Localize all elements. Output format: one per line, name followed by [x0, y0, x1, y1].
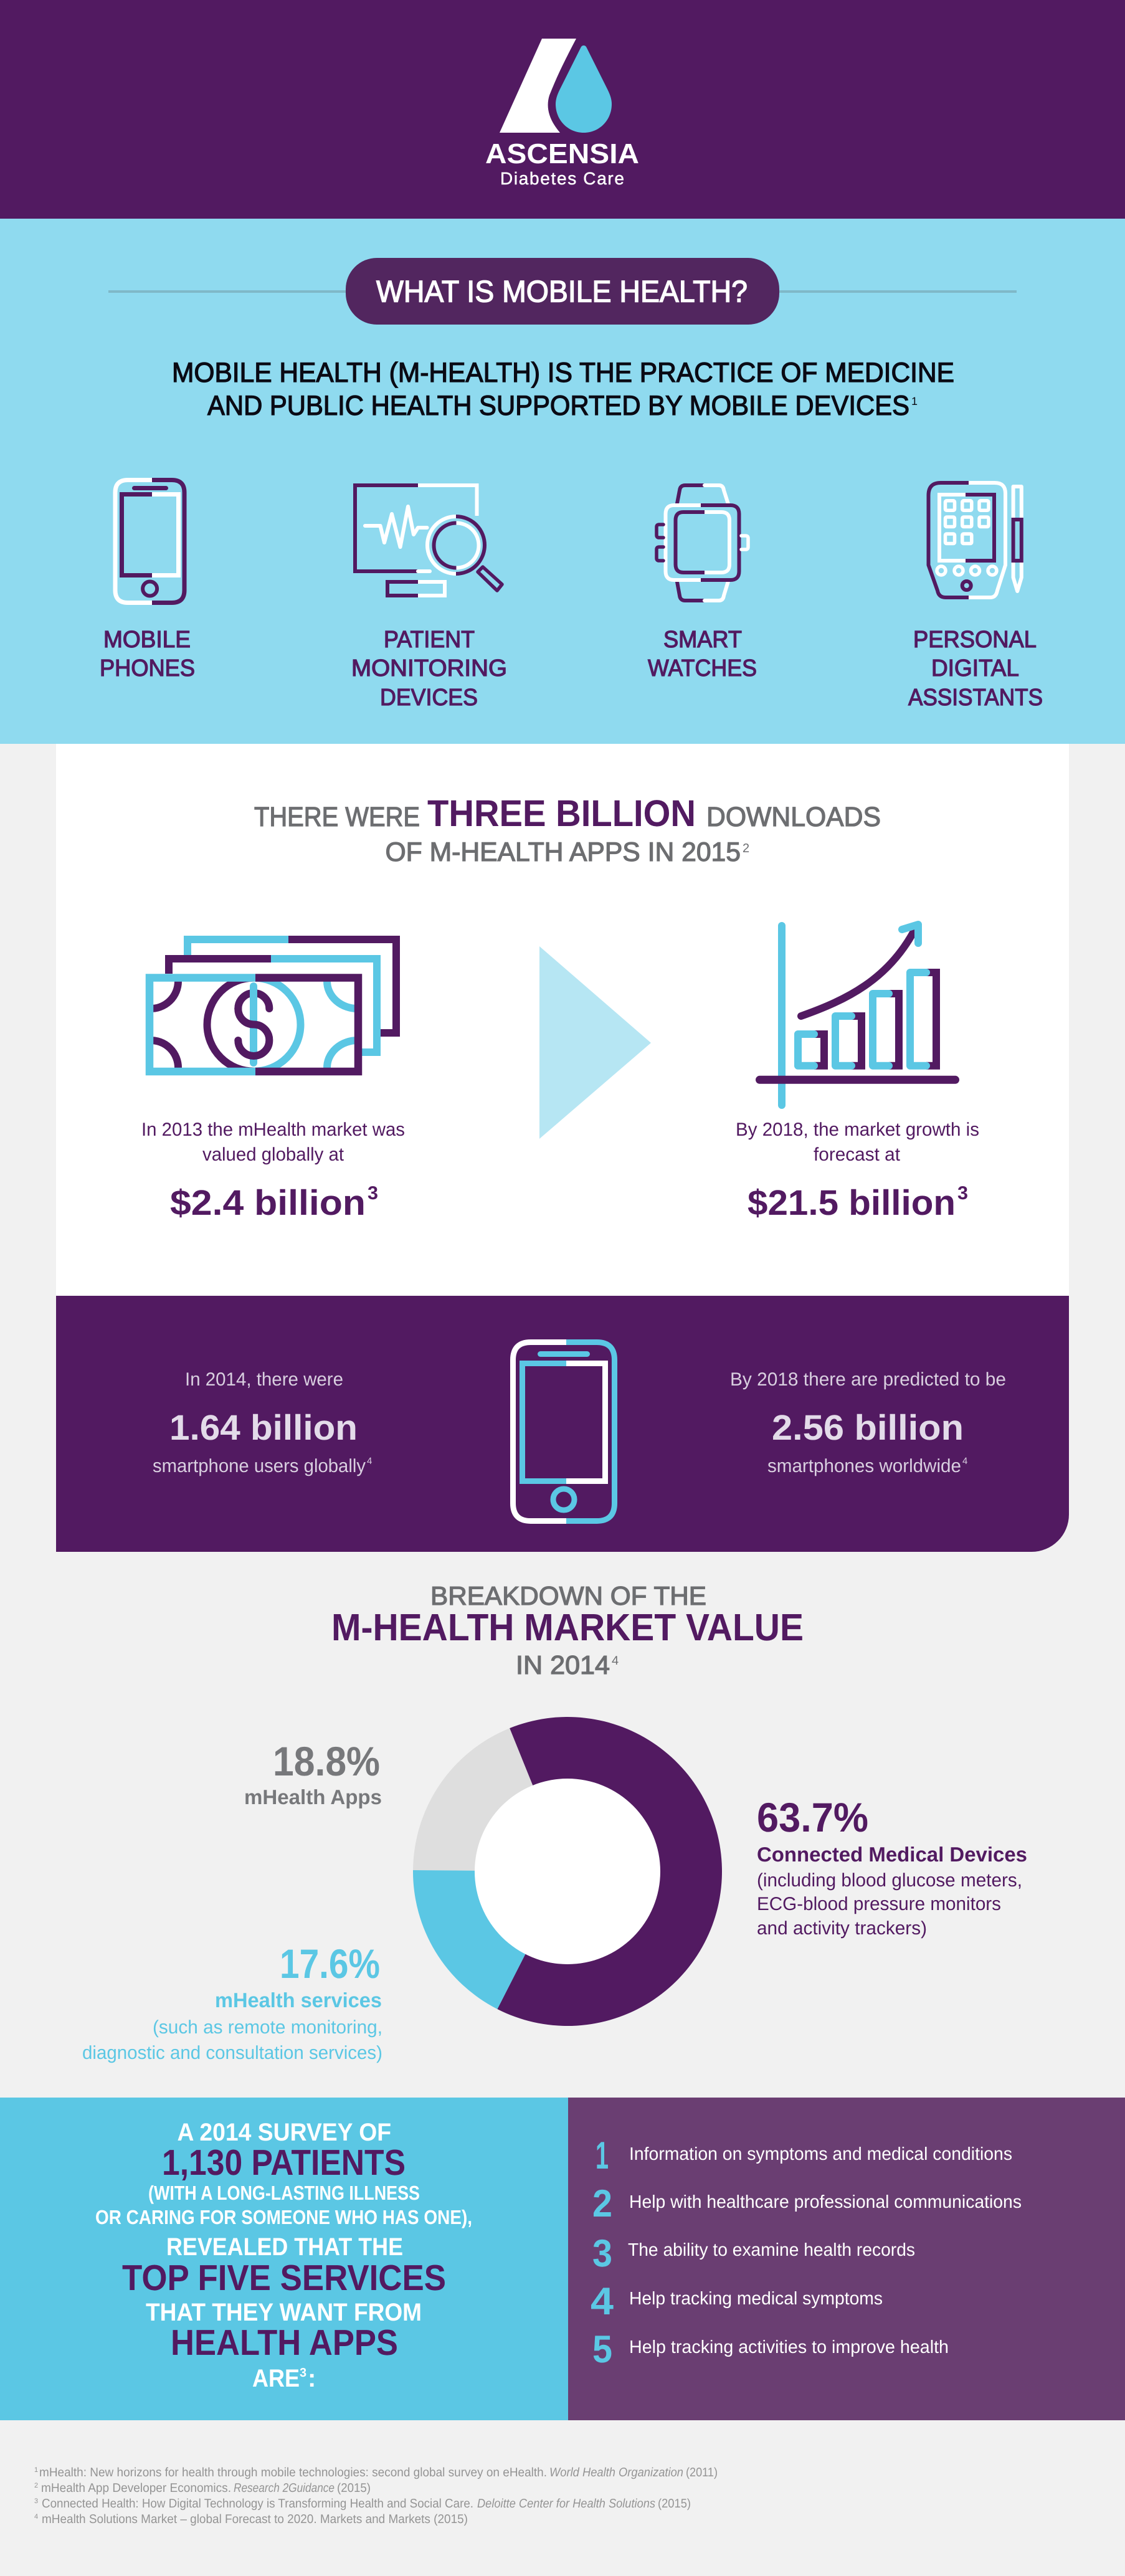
- icon: smartphone: [513, 1342, 614, 1521]
- panel: market growth: [56, 744, 1069, 1296]
- text: 2014 smartphone users: 1.64 billion: [169, 1408, 358, 1448]
- label: personal digital assistants: DIGITAL: [931, 655, 1019, 682]
- heading: market value breakdown: [331, 1581, 804, 1680]
- footnotes: Deloitte Center for Health Solutions: [477, 2497, 655, 2511]
- text: 2013 market value: $2.4 billion: [170, 1183, 366, 1223]
- heading: market value breakdown: BREAKDOWN OF THE: [430, 1581, 706, 1610]
- panel: survey summary: A 2014 SURVEY OF: [177, 2119, 391, 2146]
- icon: personal digital assistant: [928, 483, 1022, 597]
- text: 2013 market value: valued globally at: [202, 1144, 344, 1165]
- panel: top five services: [568, 2098, 1125, 2420]
- list item 5: 5: [592, 2328, 612, 2371]
- label: mHealth services: (such as remote monitoring,: [153, 2017, 382, 2038]
- label: smart watches: WATCHES: [648, 655, 757, 682]
- text: 2018 market forecast: 3: [957, 1183, 968, 1204]
- list item 4: 4: [591, 2280, 614, 2323]
- heading pill: [346, 258, 779, 325]
- panel: survey summary: REVEALED THAT THE: [166, 2233, 403, 2261]
- definition text: MOBILE HEALTH (M-HEALTH) IS THE PRACTICE OF MEDICINE: [172, 358, 954, 388]
- label: mHealth services: 17.6%: [280, 1941, 380, 1987]
- text: 2018 smartphones: 2.56 billion: [772, 1408, 964, 1448]
- label: connected medical devices: 63.7%: [757, 1794, 868, 1840]
- label: patient monitoring devices: PATIENT: [384, 627, 475, 653]
- donut chart: [413, 1717, 722, 2026]
- label: mHealth apps: mHealth Apps: [244, 1785, 382, 1808]
- footnotes: (2015): [658, 2497, 691, 2511]
- arrow: growth triangle: [539, 946, 651, 1139]
- label: mobile phones: [100, 627, 195, 682]
- panel: survey summary: THAT THEY WANT FROM: [146, 2299, 422, 2326]
- icon: mobile phone: [115, 480, 184, 603]
- text: 2014 smartphone users: 4: [367, 1456, 372, 1466]
- text: 2018 smartphones: By 2018 there are predicted to be: [730, 1369, 1006, 1390]
- text: 2018 smartphones: 4: [962, 1456, 967, 1466]
- label: smart watches: [648, 627, 757, 682]
- heading: market value breakdown: 4: [612, 1654, 619, 1668]
- list item 1: Information on symptoms and medical conditions: [629, 2144, 1012, 2164]
- icon: smart watch: [657, 485, 748, 601]
- definition text: 1: [911, 395, 918, 407]
- label: personal digital assistants: PERSONAL: [913, 627, 1037, 653]
- logo wordmark: Diabetes Care: [500, 169, 624, 188]
- label: smart watches: SMART: [663, 627, 742, 653]
- text: 2018 smartphones: smartphones worldwide: [767, 1456, 961, 1476]
- panel: survey summary: :: [308, 2365, 316, 2392]
- label: mobile phones: PHONES: [100, 655, 195, 682]
- label: patient monitoring devices: MONITORING: [351, 655, 507, 682]
- text: 2018 market forecast: [736, 1119, 979, 1223]
- label: connected medical devices: [757, 1794, 1027, 1939]
- heading pill: WHAT IS MOBILE HEALTH?: [376, 275, 748, 309]
- logo wordmark: [485, 138, 639, 188]
- logo wordmark: ASCENSIA: [485, 138, 639, 169]
- list item 2: [592, 2182, 1022, 2225]
- footnotes: mHealth Solutions Market – global Forecast to 2020. Markets and Markets (2015): [42, 2512, 468, 2526]
- label: personal digital assistants: [908, 627, 1043, 711]
- logo: Ascensia mark: [500, 39, 612, 133]
- panel: survey summary: 1,130 PATIENTS: [162, 2142, 406, 2183]
- panel: survey summary: HEALTH APPS: [171, 2322, 398, 2363]
- heading: three billion downloads: OF M-HEALTH APPS IN 2015: [385, 837, 741, 867]
- footnotes: [34, 2466, 718, 2526]
- list item 1: 1: [596, 2134, 609, 2177]
- text: 2018 market forecast: By 2018, the market growth is: [736, 1119, 979, 1140]
- list item 5: Help tracking activities to improve health: [629, 2337, 949, 2357]
- label: mHealth apps: 18.8%: [273, 1738, 380, 1784]
- footnotes: mHealth: New horizons for health through mobile technologies: second global survey on eHealth.: [39, 2466, 547, 2479]
- list item 2: Help with healthcare professional communications: [629, 2192, 1022, 2212]
- panel: what is mobile health: [0, 219, 1125, 744]
- footnotes: 3: [34, 2498, 38, 2505]
- footnotes: (2015): [337, 2481, 371, 2495]
- heading: three billion downloads: [254, 792, 881, 867]
- panel: survey summary: OR CARING FOR SOMEONE WHO HAS ONE),: [95, 2206, 472, 2228]
- panel: survey summary: [0, 2098, 568, 2420]
- icon: rising bar chart: [760, 924, 956, 1105]
- icon: stack of banknotes: [150, 939, 396, 1072]
- text: 2018 market forecast: $21.5 billion: [748, 1183, 956, 1223]
- label: mHealth services: [82, 1941, 382, 2063]
- definition text: AND PUBLIC HEALTH SUPPORTED BY MOBILE DEVICES: [207, 391, 909, 421]
- heading: three billion downloads: DOWNLOADS: [706, 802, 881, 832]
- heading: market value breakdown: IN 2014: [516, 1650, 610, 1680]
- panel: survey summary: (WITH A LONG-LASTING ILLNESS: [148, 2182, 420, 2204]
- panel: survey summary: ARE: [252, 2365, 300, 2392]
- label: mHealth apps: [244, 1738, 382, 1808]
- label: mHealth services: mHealth services: [215, 1989, 382, 2012]
- label: patient monitoring devices: DEVICES: [380, 685, 478, 711]
- footnotes: 1: [34, 2466, 38, 2474]
- panel: survey summary: 3: [300, 2366, 306, 2380]
- text: 2018 smartphones: [730, 1369, 1006, 1476]
- panel: smartphone users: [56, 1296, 1069, 1552]
- footnotes: Connected Health: How Digital Technology is Transforming Health and Social Care.: [42, 2497, 473, 2511]
- heading: three billion downloads: THREE BILLION: [427, 792, 696, 834]
- list item 4: Help tracking medical symptoms: [629, 2289, 883, 2309]
- text: 2013 market value: [141, 1119, 405, 1223]
- definition text: [172, 358, 954, 421]
- heading: three billion downloads: THERE WERE: [254, 802, 420, 832]
- list item 1: [596, 2134, 1012, 2177]
- text: 2013 market value: 3: [368, 1183, 378, 1204]
- label: mobile phones: MOBILE: [103, 627, 191, 653]
- footnotes: Research 2Guidance: [234, 2481, 335, 2495]
- text: 2013 market value: In 2013 the mHealth market was: [141, 1119, 405, 1140]
- text: 2014 smartphone users: [153, 1369, 372, 1476]
- label: personal digital assistants: ASSISTANTS: [908, 685, 1043, 711]
- label: connected medical devices: Connected Medical Devices: [757, 1843, 1027, 1866]
- heading: three billion downloads: 2: [743, 842, 749, 855]
- list item 3: 3: [592, 2232, 612, 2275]
- panel: market value breakdown: [82, 1581, 1027, 2063]
- text: 2014 smartphone users: smartphone users globally: [153, 1456, 366, 1476]
- list item 5: [592, 2328, 949, 2371]
- panel: survey summary: TOP FIVE SERVICES: [122, 2258, 446, 2298]
- footnotes: (2011): [686, 2466, 718, 2479]
- icon: patient monitoring device: [355, 485, 502, 596]
- heading: market value breakdown: M-HEALTH MARKET VALUE: [331, 1606, 804, 1648]
- label: connected medical devices: ECG-blood pressure monitors: [757, 1894, 1001, 1914]
- panel: header: [0, 0, 1125, 219]
- footnotes: mHealth App Developer Economics.: [41, 2481, 231, 2495]
- footnotes: World Health Organization: [549, 2466, 683, 2479]
- list item 4: [591, 2280, 883, 2323]
- list item 3: The ability to examine health records: [628, 2240, 915, 2260]
- label: connected medical devices: (including blood glucose meters,: [757, 1870, 1022, 1891]
- list item 2: 2: [592, 2182, 612, 2225]
- text: 2018 market forecast: forecast at: [814, 1144, 901, 1165]
- text: 2014 smartphone users: In 2014, there were: [185, 1369, 343, 1390]
- list item 3: [592, 2232, 915, 2275]
- footnotes: 2: [34, 2482, 38, 2489]
- label: patient monitoring devices: [351, 627, 507, 711]
- label: mHealth services: diagnostic and consultation services): [82, 2043, 382, 2063]
- label: connected medical devices: and activity trackers): [757, 1918, 927, 1939]
- footnotes: 4: [34, 2513, 38, 2521]
